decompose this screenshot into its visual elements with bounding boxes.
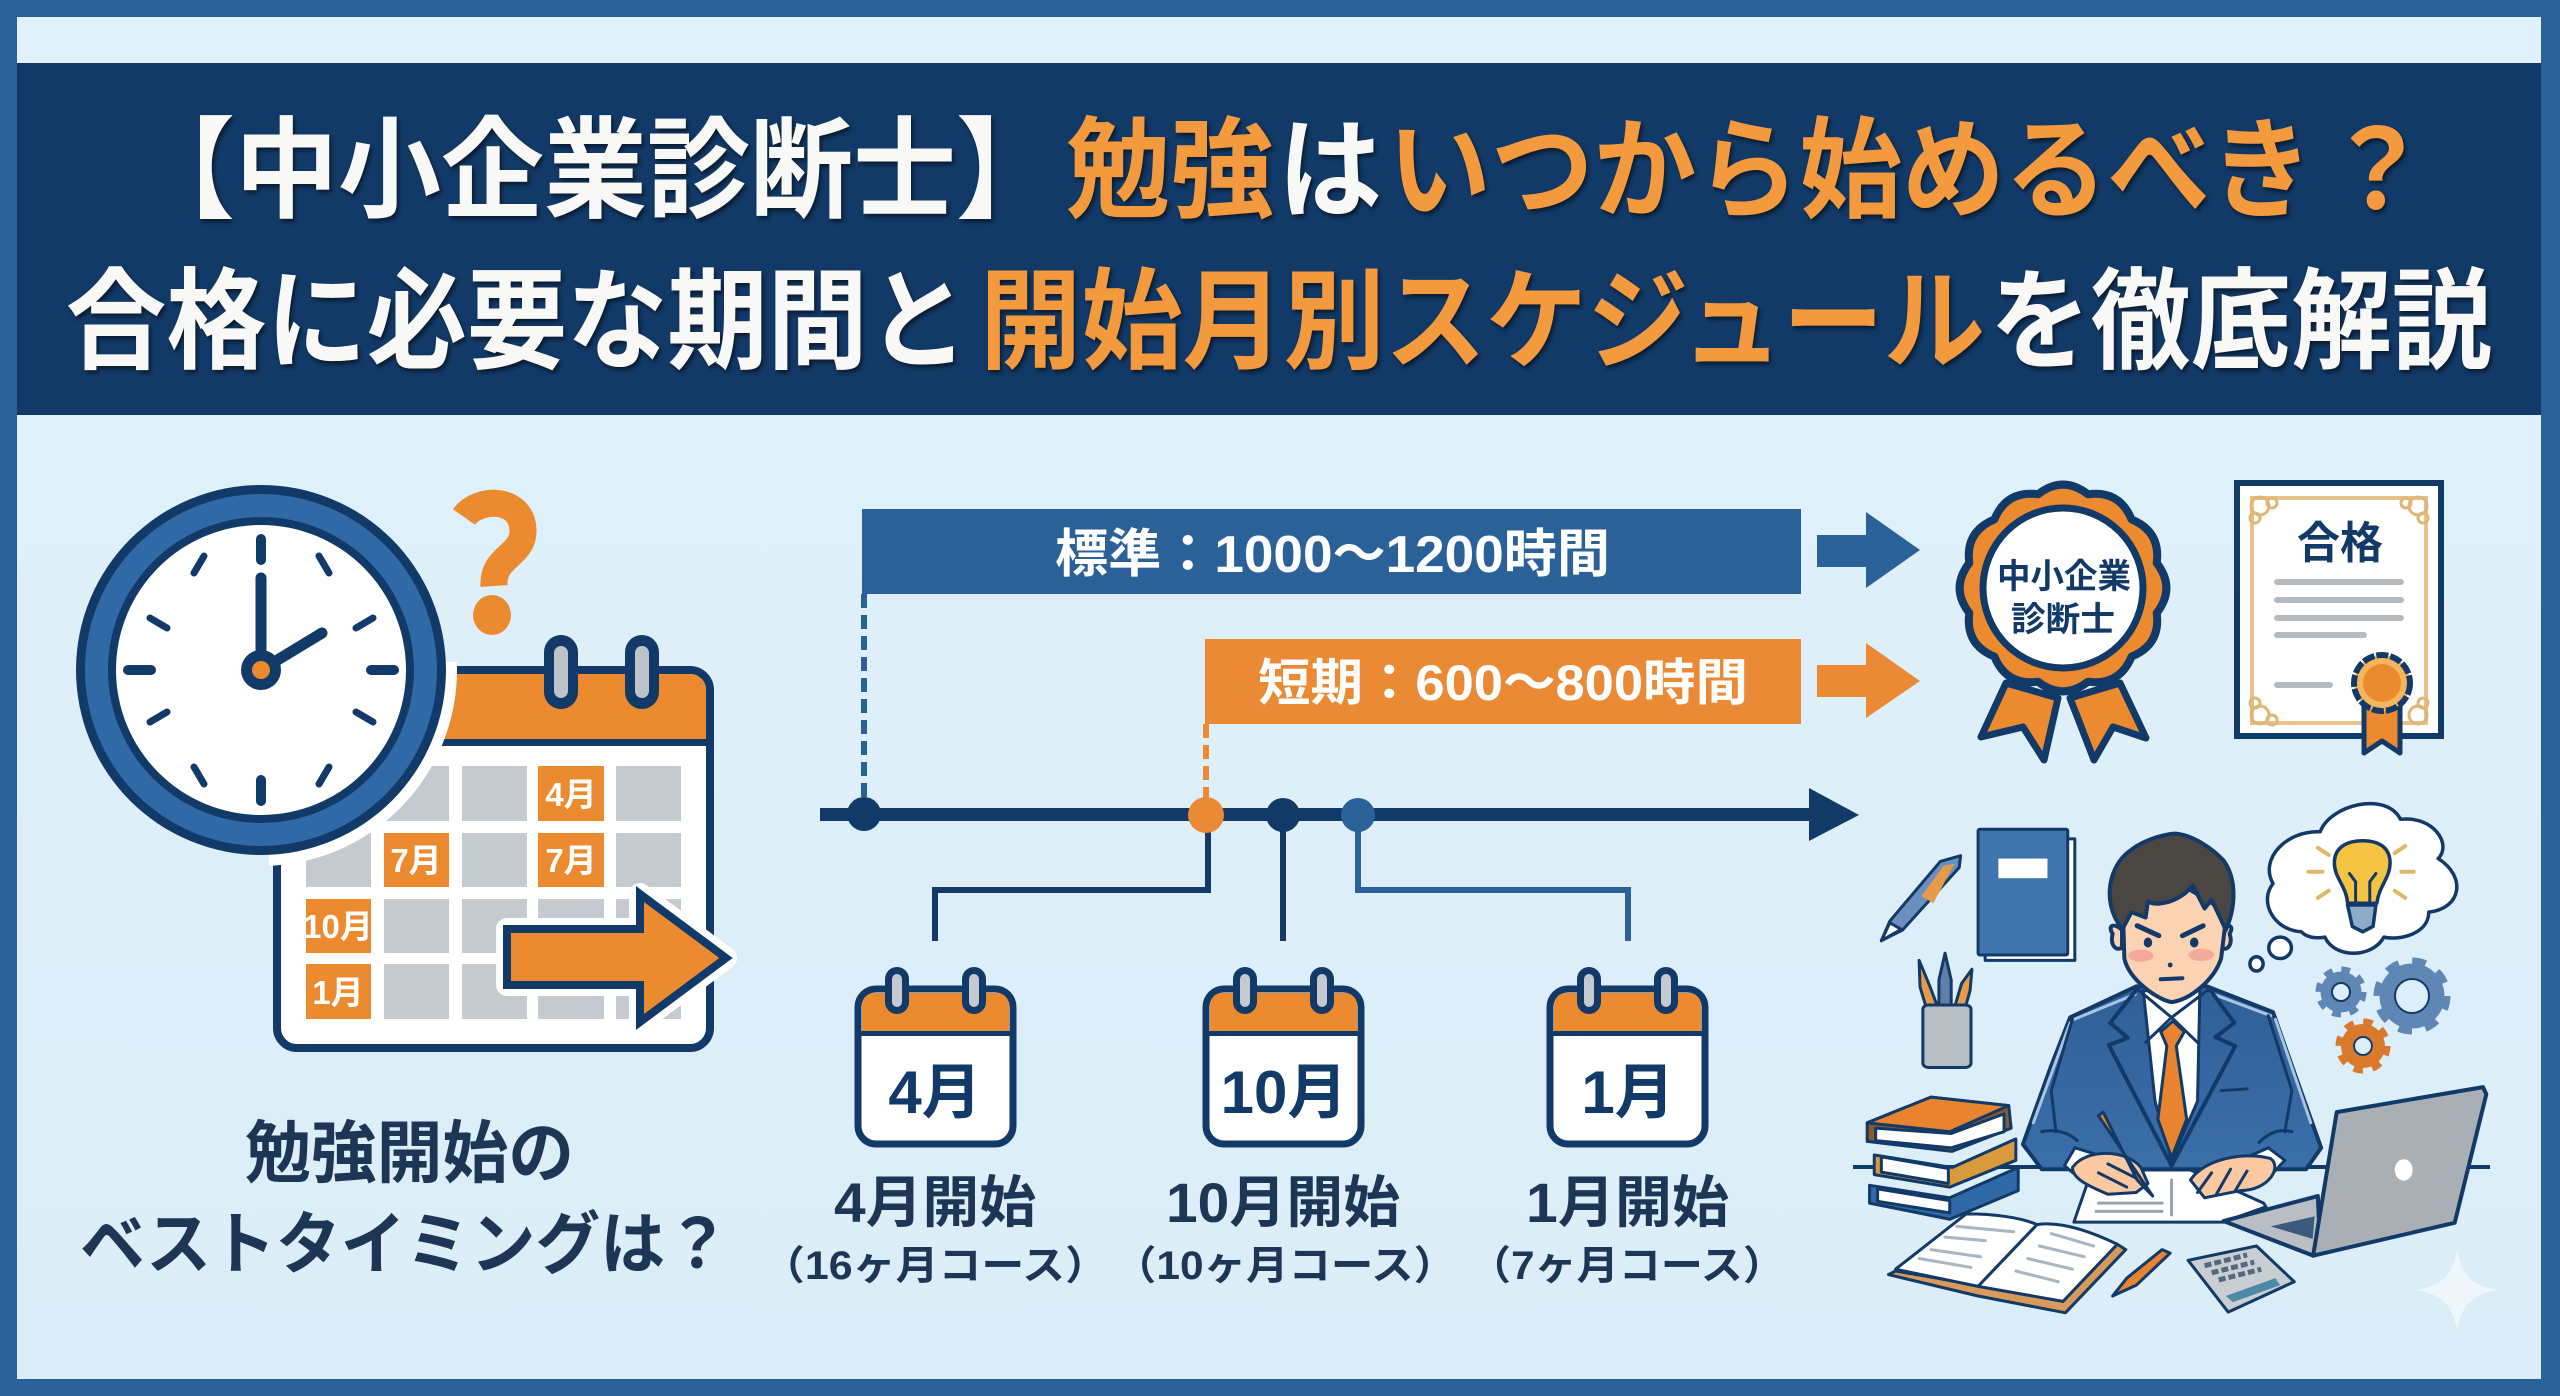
connector lines to month calendars (935, 830, 1628, 941)
icon: calendar October (1206, 967, 1361, 1144)
timeline dots (847, 797, 1375, 833)
icon: large calendar (277, 635, 710, 1048)
icon: pass certificate (2237, 483, 2441, 753)
text: best timing question: ベストタイミングは？ (80, 1207, 730, 1283)
title line 2: 開始月別スケジュール (980, 261, 1985, 384)
course labels: 4月開始 (834, 1171, 1036, 1234)
dashed connector orange (1203, 724, 1209, 798)
icon: calendar October: 10月 (1221, 1059, 1347, 1126)
arrow: orange (1817, 643, 1920, 718)
icon: calendar April: 4月 (888, 1059, 982, 1126)
month labels: 1月 (312, 974, 364, 1011)
icon: pass certificate: 合格 (2297, 519, 2383, 568)
bar: short-term hours (1205, 639, 1801, 724)
title line 2 (66, 261, 2492, 384)
arrow: blue (1817, 512, 1920, 588)
month labels: 10月 (303, 908, 373, 945)
icon: open book (1888, 1214, 2126, 1313)
icon: paper (2074, 1170, 2266, 1222)
icon: laptop (2223, 1087, 2486, 1256)
icon: calculator (2188, 1246, 2294, 1312)
title line 2: 合格に必要な期間と (66, 261, 968, 384)
calendar grid (306, 766, 681, 1019)
icon: thought bubble (2250, 804, 2457, 971)
icon: notebook (1978, 829, 2075, 960)
bar: standard hours: 標準：1000～1200時間 (1055, 526, 1610, 584)
title line 1: 【中小企業診断士】 (132, 110, 1059, 233)
month labels (303, 776, 597, 1011)
bar: standard hours (862, 509, 1801, 594)
desk line (1853, 1165, 2490, 1169)
hands and pencil (2064, 1112, 2285, 1198)
title line 1: 勉強 (1066, 110, 1274, 233)
illustration: studying businessman (1853, 804, 2490, 1313)
icon: calendar January: 1月 (1581, 1059, 1675, 1126)
panel: left illustration (65, 474, 730, 1283)
course labels: 1月開始 (1526, 1171, 1729, 1234)
bar: short-term hours: 短期：600～800時間 (1258, 655, 1748, 711)
course labels: （16ヶ月コース） (762, 1244, 1108, 1288)
dashed connector blue (861, 594, 867, 798)
icon: pen (1881, 856, 1961, 941)
icon: calendar January (1550, 967, 1705, 1144)
course labels: （10ヶ月コース） (1114, 1244, 1456, 1288)
icon: small pencil (2113, 1250, 2170, 1296)
month labels: 7月 (545, 842, 597, 879)
title line 1: ？ (2325, 110, 2429, 233)
clock halo (269, 662, 457, 866)
icon: pencil cup (1919, 953, 1972, 1067)
panel: timeline (762, 509, 1920, 1288)
icon: gears (2319, 962, 2446, 1070)
arrow: calendar forward arrow (507, 894, 726, 1022)
icon: rosette badge: 中小企業 (1997, 558, 2131, 596)
text: best timing question (80, 1116, 730, 1283)
course labels (762, 1171, 1785, 1288)
title line 1: は (1278, 110, 1382, 233)
title line 2: を徹底解説 (1990, 261, 2492, 384)
text: best timing question: 勉強開始の (245, 1116, 574, 1192)
icon: clock (76, 485, 446, 855)
title banner (17, 63, 2541, 415)
course labels: 10月開始 (1166, 1171, 1400, 1234)
icon: rosette badge: 診断士 (2011, 601, 2115, 639)
icon: sparkle (2415, 1249, 2499, 1331)
arrow: timeline axis (820, 788, 1859, 841)
month labels: 4月 (545, 776, 597, 813)
icon: question mark (464, 503, 523, 635)
icon: book stack (1867, 1097, 2018, 1219)
month labels: 7月 (390, 842, 442, 879)
title line 1 (132, 110, 2429, 233)
title line 1: いつから始めるべき (1388, 110, 2313, 233)
highlighted months (306, 766, 604, 1019)
course labels: （7ヶ月コース） (1469, 1244, 1785, 1288)
icon: calendar April (858, 967, 1013, 1144)
icon: rosette badge (1960, 485, 2166, 760)
figure: man (2023, 834, 2321, 1169)
